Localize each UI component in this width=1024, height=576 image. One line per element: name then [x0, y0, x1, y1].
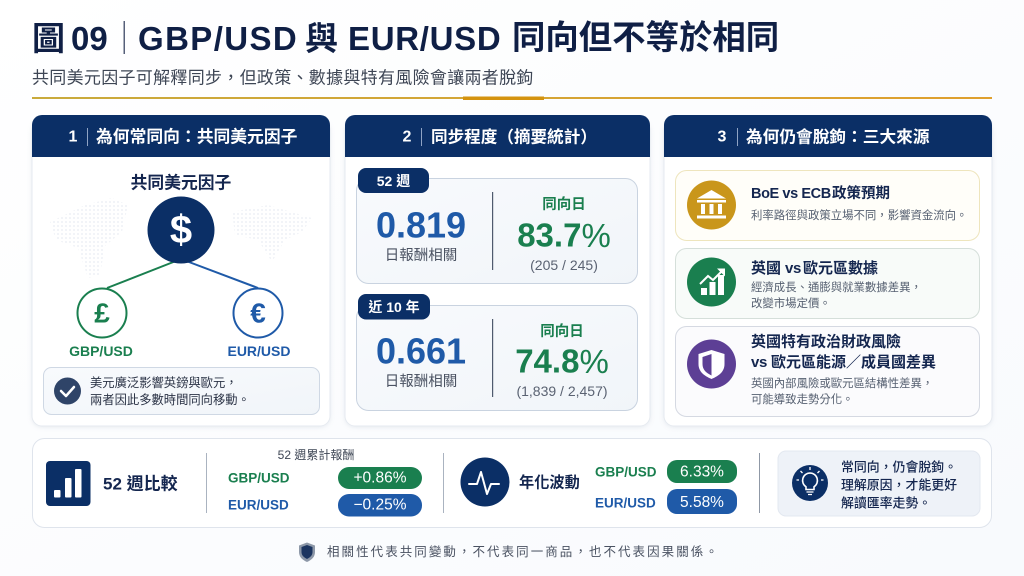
icon: shield	[687, 340, 736, 388]
card: data: 歐元區數據	[803, 258, 878, 276]
callout: 兩者因此多數時間同向移動。	[90, 392, 250, 407]
tag: 10 years: 近 10 年	[368, 299, 420, 315]
icon: bar chart	[46, 461, 90, 506]
52 week returns: EUR/USD	[228, 498, 289, 512]
card: 10 years: 74.8%	[515, 342, 609, 380]
tag: 10 years	[358, 294, 430, 320]
callout	[44, 368, 320, 414]
panel: why usually aligned	[32, 115, 330, 426]
card: policy: BoE vs ECB	[751, 186, 831, 202]
title: 09	[71, 20, 108, 56]
takeaway box	[778, 451, 980, 516]
card: data: 英國	[751, 260, 781, 276]
52 week returns: GBP/USD	[228, 470, 290, 486]
volatility values	[595, 460, 737, 514]
card: 52 weeks: 同向日	[542, 196, 586, 213]
icon: pound: £	[94, 298, 110, 328]
icon: euro	[234, 288, 282, 338]
icon: small shield	[299, 542, 315, 562]
footer note	[299, 542, 720, 562]
card: 52 weeks: 日報酬相關	[385, 247, 457, 264]
icon: euro: €	[250, 298, 266, 328]
card: specific risks: 英國內部風險或歐元區結構性差異，	[751, 376, 933, 390]
title: 同向但不等於相同	[512, 20, 779, 56]
52 week heading: 52 週比較	[103, 474, 178, 494]
title: EUR/USD	[348, 20, 501, 56]
panel 2 header: 同步程度（摘要統計）	[431, 126, 597, 146]
panel 3 header: 為何仍會脫鉤：三大來源	[746, 126, 930, 146]
panel 1 header	[32, 115, 330, 157]
card: 10 years	[356, 294, 638, 410]
52 week returns	[228, 447, 422, 516]
card: 10 years: 0.661	[376, 330, 466, 372]
52 week returns: 52 週累計報酬	[278, 447, 354, 462]
icon: pound	[78, 288, 126, 338]
label GBP/USD: GBP/USD	[69, 343, 133, 359]
volatility heading: 年化波動	[519, 474, 580, 492]
volatility values: EUR/USD	[595, 496, 656, 510]
title	[32, 20, 779, 56]
card: 52 weeks: 83.7%	[517, 216, 611, 254]
card: 52 weeks: (205 / 245)	[530, 257, 598, 273]
label EUR/USD: EUR/USD	[227, 343, 291, 359]
card: specific risks: 英國特有政治財政風險	[751, 332, 901, 350]
icon: dollar	[148, 196, 214, 264]
panel 1 header: 為何常同向：共同美元因子	[96, 126, 298, 146]
panel 2 header	[345, 115, 650, 157]
card: specific risks	[676, 326, 980, 416]
panel: bottom comparison bar	[32, 438, 992, 528]
card: specific risks: vs	[751, 354, 767, 370]
card: policy: 政策預期	[832, 184, 890, 202]
panel 3 header	[664, 115, 992, 157]
panel 1 header: 1	[69, 128, 78, 146]
title: GBP/USD	[138, 20, 298, 56]
card: 10 years: 同向日	[540, 323, 584, 340]
card: specific risks: 可能導致走勢分化。	[751, 392, 854, 406]
connector lines	[107, 259, 258, 288]
card: 10 years: (1,839 / 2,457)	[516, 383, 608, 399]
footer note: 相關性代表共同變動，不代表同一商品，也不代表因果關係。	[327, 544, 720, 559]
volatility values: GBP/USD	[595, 464, 657, 480]
icon: check	[54, 378, 81, 404]
takeaway box: 常同向，仍會脫鉤。	[841, 460, 957, 474]
icon: dollar: $	[170, 208, 192, 252]
world map dots	[50, 198, 312, 278]
pill: GBP volatility: 6.33%	[680, 464, 724, 480]
card: data: 改變市場定價。	[751, 296, 831, 310]
card: specific risks: 歐元區能源／成員國差異	[771, 352, 936, 370]
title: 與	[305, 20, 338, 56]
card: data: vs	[785, 260, 801, 276]
card: 52 weeks: 0.819	[376, 204, 466, 246]
takeaway box: 解讀匯率走勢。	[841, 496, 931, 510]
pill: GBP return: +0.86%	[353, 470, 407, 486]
pill: EUR return	[338, 494, 422, 516]
icon: pulse	[460, 458, 510, 506]
card: 52 weeks	[356, 168, 638, 284]
icon: growth chart	[687, 258, 736, 306]
icon: bank	[687, 180, 736, 230]
tag: 52 weeks: 52 週	[377, 173, 410, 189]
icon: light bulb	[792, 465, 828, 501]
pill: EUR volatility	[667, 489, 737, 514]
pill: GBP volatility	[667, 460, 737, 483]
card: policy: 利率路徑與政策立場不同，影響資金流向。	[751, 208, 967, 222]
pill: GBP return	[338, 467, 422, 489]
panel: degree of synchrony	[345, 115, 650, 426]
card: policy	[676, 170, 980, 240]
gold rule	[32, 96, 992, 100]
panel: three sources of divergence	[664, 115, 992, 426]
pill: EUR return: −0.25%	[353, 496, 407, 514]
card: data	[676, 248, 980, 318]
card: data: 經濟成長、通膨與就業數據差異，	[751, 280, 922, 294]
tag: 52 weeks	[358, 168, 429, 193]
panel 3 header: 3	[718, 128, 727, 146]
pill: EUR volatility: 5.58%	[680, 494, 724, 511]
panel 2 header: 2	[403, 128, 412, 146]
card: 10 years: 日報酬相關	[385, 373, 457, 390]
takeaway box: 理解原因，才能更好	[841, 478, 957, 492]
subtitle: 共同美元因子可解釋同步，但政策、數據與特有風險會讓兩者脫鉤	[32, 68, 534, 88]
title: 圖	[32, 20, 65, 56]
factor label: 共同美元因子	[131, 172, 232, 192]
callout: 美元廣泛影響英鎊與歐元，	[90, 375, 238, 390]
